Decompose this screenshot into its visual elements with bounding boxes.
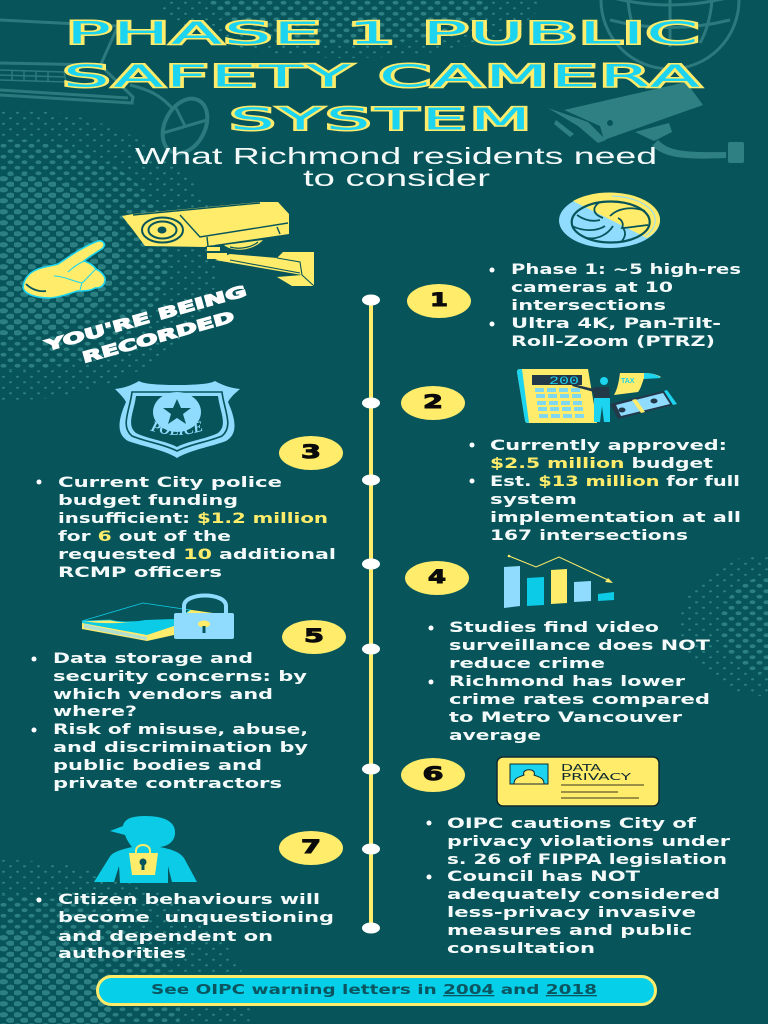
text block 7: citizen behaviours: become unquestioning [58,910,334,926]
text block 3: police budget: insufficient: $1.2 million [58,511,328,527]
text block 4: crime studies: surveillance does NOT [449,638,711,654]
text block 1: camera specs [490,262,741,350]
text block 7: citizen behaviours: Citizen behaviours will [58,892,320,908]
text block 5: data storage: which vendors and [53,687,273,703]
text block 5: data storage: Data storage and [53,651,253,667]
number badge 7 [279,831,343,865]
number badge 3 [279,436,343,470]
text block 2: budget: implementation at all [490,510,741,526]
icon: data privacy card: DATA [561,763,602,774]
number badge 5 [282,620,346,654]
text block 2: budget: 167 intersections [490,528,688,544]
number badge 5: 5 [304,625,324,647]
number badge 1: 1 [430,289,448,311]
icon: camera aperture [559,192,660,248]
text block 3: police budget: RCMP officers [58,565,222,581]
icon: police badge [115,381,240,458]
icon: ghost globe [601,0,739,69]
text block 6: OIPC: Council has NOT [447,869,641,885]
text block 1: camera specs: Roll-Zoom (PTRZ) [511,334,715,350]
text block 4: crime studies: to Metro Vancouver [449,710,682,726]
text block 3: police budget: for 6 out of the [58,529,231,545]
text block 7: citizen behaviours: authorities [58,946,186,962]
icon: person with padlock [94,816,197,883]
text block 5: data storage: private contractors [53,776,282,792]
number badge 4: 4 [428,566,446,588]
text block 4: crime studies [428,620,711,744]
subtitle: What Richmond residents need [135,143,657,169]
text block 6: OIPC: less-privacy invasive [447,905,696,921]
text block 4: crime studies: reduce crime [449,656,605,672]
text block 2: budget: Est. $13 million for full [490,474,740,490]
halftone: right [680,553,768,697]
text block 4: crime studies: Studies find video [449,620,660,636]
text block 1: camera specs: Ultra 4K, Pan-Tilt- [511,316,721,332]
title [63,16,700,137]
number badge 6 [401,758,465,792]
halftone: left [0,110,220,400]
text block 3: police budget: budget funding [58,493,238,509]
text block 3: police budget: Current City police [58,475,282,491]
icon: bar chart [504,555,614,608]
text block 2: budget: $2.5 million budget [490,456,713,472]
icon: data privacy card [497,757,659,806]
text block 2: budget: system [490,492,577,508]
text block 6: OIPC [426,816,730,957]
icon: calculator, person and money: 200 [549,376,579,388]
text block 5: data storage [32,651,308,792]
icon: server and padlock [82,596,234,641]
text block 6: OIPC: privacy violations under [447,834,730,850]
text block 1: camera specs: intersections [511,298,666,314]
text block 3: police budget: requested 10 additional [58,547,336,563]
text block 6: OIPC: adequately considered [447,887,720,903]
number badge 6: 6 [422,763,444,785]
subtitle [135,143,657,191]
title: SAFETY CAMERA [63,59,700,94]
icon: ghost camera [548,82,744,163]
title: PHASE 1 PUBLIC [66,16,698,51]
label: you're being recorded: RECORDED [80,308,236,367]
icon: security camera [122,202,314,286]
number badge 7: 7 [301,836,321,858]
text block 4: crime studies: Richmond has lower [449,674,685,690]
text block 6: OIPC: s. 26 of FIPPA legislation [447,852,727,868]
text block 1: camera specs: cameras at 10 [511,280,673,296]
text block 7: citizen behaviours [36,892,334,962]
text block 4: crime studies: crime rates compared [449,692,710,708]
title: SYSTEM [230,102,531,137]
footer callout [98,976,656,1004]
text block 5: data storage: and discrimination by [53,740,308,756]
number badge 2 [401,386,465,420]
number badge 2: 2 [423,391,443,413]
text block 5: data storage: where? [53,704,137,720]
timeline [362,294,380,934]
icon: calculator, person and money [517,369,677,423]
icon: police badge: POLICE [150,421,202,435]
label: you're being recorded: YOU'RE BEING [42,282,249,355]
text block 2: budget [470,438,741,544]
text block 4: crime studies: average [449,728,541,744]
text block 5: data storage: security concerns: by [53,669,307,685]
text block 6: OIPC: OIPC cautions City of [447,816,697,832]
icon: ghost laptop and mouse [0,20,216,161]
text block 1: camera specs: Phase 1: ~5 high-res [511,262,741,278]
text block 2: budget: Currently approved: [490,438,727,454]
text block 6: OIPC: measures and public [447,923,692,939]
text block 5: data storage: Risk of misuse, abuse, [53,722,308,738]
icon: pointing hand [23,241,105,298]
number badge 3: 3 [301,441,321,463]
subtitle: to consider [303,165,491,191]
number badge 4 [405,561,469,595]
text block 5: data storage: public bodies and [53,758,262,774]
text block 6: OIPC: consultation [447,941,595,957]
halftone: bottom left [0,860,250,1024]
icon: calculator, person and money: TAX [621,378,635,385]
text block 7: citizen behaviours: and dependent on [58,929,273,945]
icon: data privacy card: PRIVACY [561,772,631,783]
label: you're being recorded [42,282,249,367]
number badge 1 [407,284,471,318]
halftone: top [160,0,540,58]
footer callout: See OIPC warning letters in 2004 and 2018 [151,983,597,998]
text block 3: police budget [36,475,336,581]
